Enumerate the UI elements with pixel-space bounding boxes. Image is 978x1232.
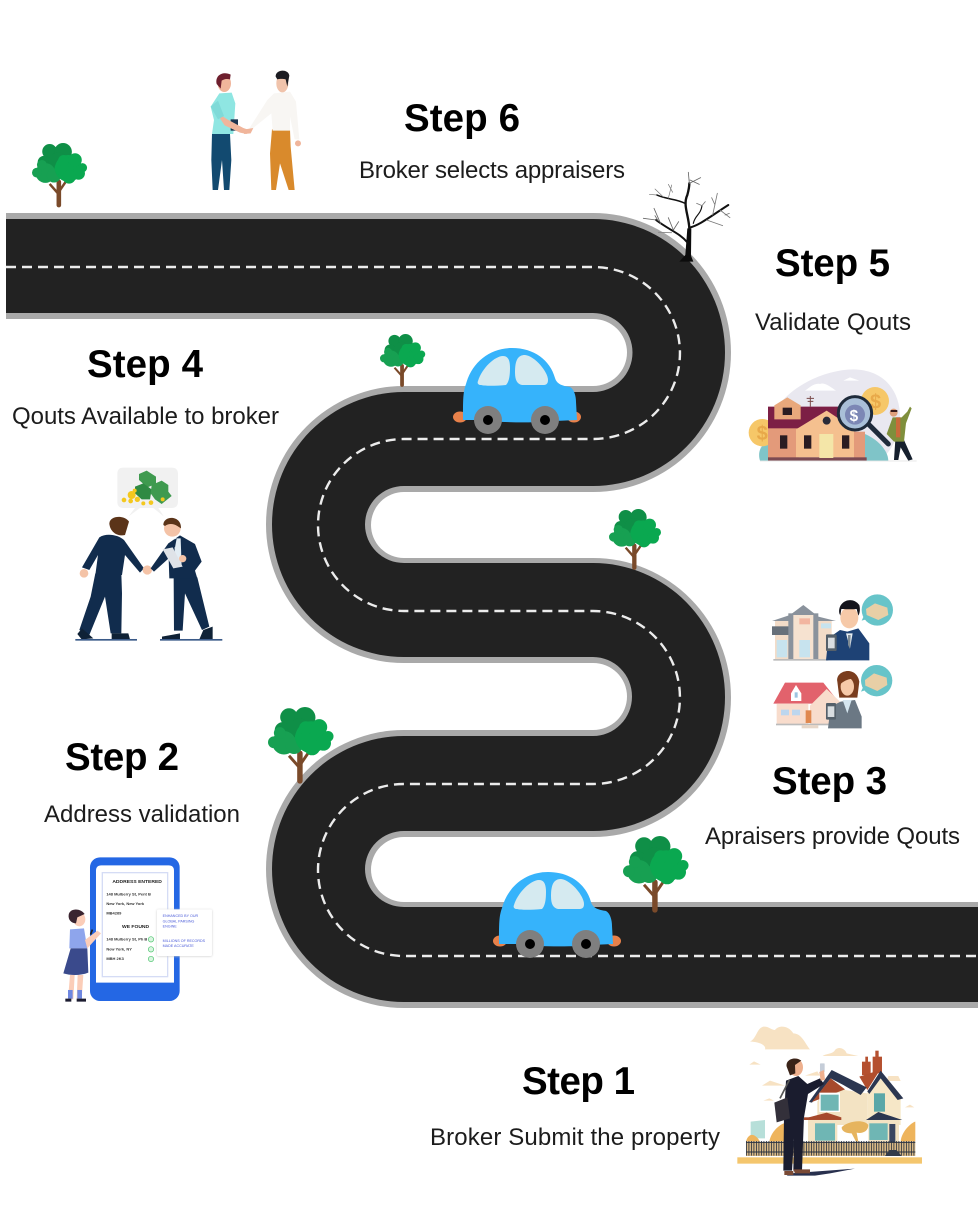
illustration: phone with address validation (step 2): 148 Mulberry St, Ph B (106, 937, 147, 942)
car: upper road (453, 348, 581, 434)
illustration: appraisers with calculators (step 3) (772, 594, 893, 728)
winding road (6, 213, 978, 1008)
illustration: phone with address validation (step 2): ADDRESS ENTERED (112, 879, 162, 885)
illustration: two people shaking hands (step 6) (211, 71, 301, 190)
step 1 description: Broker Submit the property (430, 1124, 720, 1151)
tree: middle right (609, 509, 661, 568)
tree: upper bend (380, 334, 425, 385)
tree: top left (32, 143, 87, 205)
illustration: phone with address validation (step 2): MILLIONS OF RECORDS (163, 939, 206, 943)
illustration: deal handshake with money bubble (step 4) (75, 468, 222, 641)
illustration: phone with address validation (step 2): MADE ACCURATE (163, 944, 194, 948)
step 3 description: Apraisers provide Qouts (705, 823, 960, 850)
broker figure (774, 1059, 855, 1176)
house: lower (773, 683, 843, 728)
illustration: broker photographing house (step 1) (737, 1027, 922, 1176)
illustration: phone with address validation (step 2): MBH 2K3 (106, 956, 125, 961)
illustration: phone with address validation (step 2): 148 Mulberry St, Pent B (106, 891, 151, 896)
clouds (749, 1027, 914, 1107)
illustration: phone with address validation (step 2): New York, NY (106, 946, 132, 951)
house: upper (772, 605, 836, 661)
step 4 description: Qouts Available to broker (12, 403, 279, 430)
illustration: phone with address validation (step 2) (63, 857, 212, 1002)
step 2 heading: Step 2 (65, 736, 179, 779)
illustration: phone with address validation (step 2): New York, New York (106, 901, 145, 906)
step 4 heading: Step 4 (87, 343, 204, 386)
step 5 heading: Step 5 (775, 242, 890, 285)
illustration: house inspection with magnifier (step 5): $ (757, 423, 768, 445)
illustration: phone with address validation (step 2): ENGINE (163, 925, 177, 929)
illustration: phone with address validation (step 2): WE FOUND (122, 924, 150, 930)
tree: left of lower bend (268, 707, 334, 781)
tree: lower right (623, 836, 689, 910)
illustration: phone with address validation (step 2): ENHANCED BY OUR (163, 914, 198, 918)
car: lower road (493, 872, 621, 958)
bare tree (643, 172, 730, 262)
illustration: house inspection with magnifier (step 5): $ (870, 391, 881, 413)
speech bubble with cash (117, 468, 178, 517)
illustration: phone with address validation (step 2): GLOBAL PARSING (163, 919, 195, 923)
illustration: house inspection with magnifier (step 5): $ (850, 408, 859, 425)
house (804, 1051, 903, 1151)
fence and shrubs (746, 1142, 915, 1156)
step 6 description: Broker selects appraisers (359, 157, 625, 184)
step 2 description: Address validation (44, 801, 240, 828)
step 5 description: Validate Qouts (755, 309, 911, 336)
step 1 heading: Step 1 (522, 1060, 635, 1103)
illustration: house inspection with magnifier (step 5) (749, 369, 917, 461)
step 6 heading: Step 6 (404, 97, 520, 140)
step 3 heading: Step 3 (772, 760, 887, 803)
illustration: phone with address validation (step 2): MB4269 (106, 911, 122, 916)
